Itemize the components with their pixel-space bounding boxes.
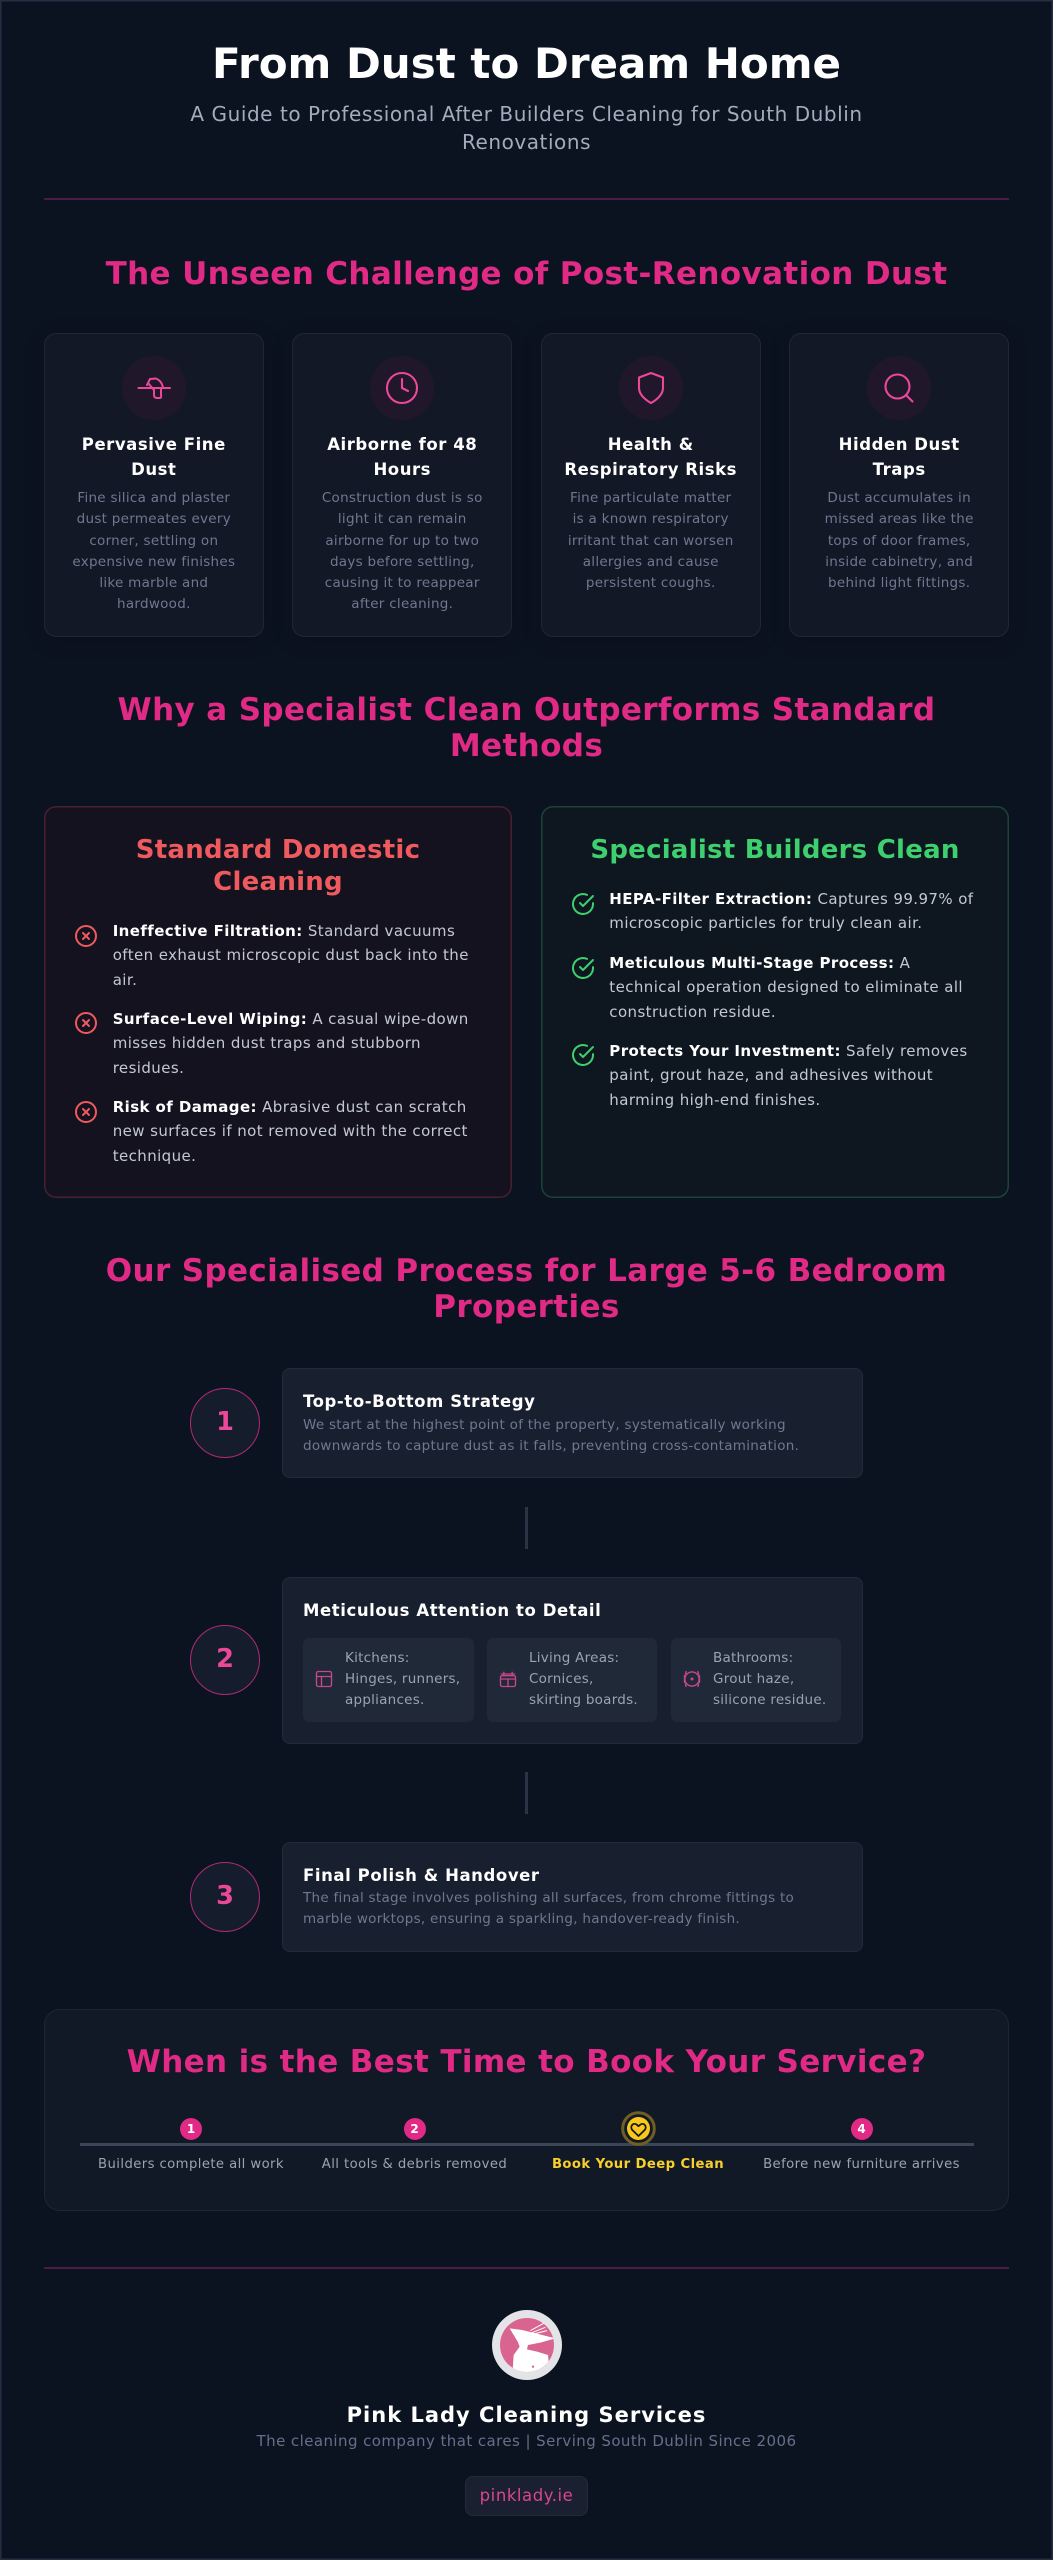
- step label 2: All tools & debris removed: [322, 2157, 507, 2172]
- icon: cross: [75, 1012, 97, 1034]
- panel: specialist builders clean: [541, 806, 1009, 1198]
- step heading: Meticulous Attention to Detail: [303, 1601, 601, 1620]
- step 1: [190, 1368, 863, 1478]
- detail text: Bathrooms:: [713, 1650, 793, 1666]
- heading: unseen challenge: The Unseen Challenge of Post-Renovation Dust: [106, 256, 947, 292]
- step number: 3: [216, 1881, 234, 1911]
- panel: hidden traps: [789, 333, 1009, 637]
- icon: magnifier: [867, 356, 931, 420]
- card heading: [564, 435, 737, 479]
- detail: living areas: [487, 1638, 657, 1722]
- card heading: [839, 435, 960, 479]
- timeline heading: When is the Best Time to Book Your Service?: [127, 2044, 926, 2080]
- step text: marble worktops, ensuring a sparkling, handover-ready finish.: [303, 1910, 740, 1926]
- footer: company name: Pink Lady Cleaning Services: [347, 2403, 706, 2427]
- card text: Construction dust is so: [322, 490, 483, 506]
- step 3: [190, 1842, 863, 1952]
- icon: check: [572, 1044, 594, 1066]
- step marker 1: [180, 2118, 202, 2140]
- card text: [72, 490, 235, 612]
- logo: pink lady: [492, 2310, 562, 2380]
- list item: microscopic particles for truly clean air.: [609, 914, 922, 932]
- card text: [568, 490, 734, 591]
- detail text: Cornices,: [529, 1670, 594, 1686]
- panel heading: Cleaning: [213, 867, 343, 897]
- icon: living areas: [500, 1672, 516, 1688]
- step marker: book (heart): [621, 2111, 656, 2146]
- list item: Meticulous Multi-Stage Process: A: [609, 954, 910, 972]
- list item: [113, 1010, 469, 1077]
- panel: health risks: [541, 333, 761, 637]
- detail text: silicone residue.: [713, 1692, 826, 1708]
- step number: 1: [216, 1407, 234, 1437]
- card text: causing it to reappear: [325, 575, 480, 591]
- list item: [113, 922, 469, 989]
- icon: cross: [75, 1101, 97, 1123]
- detail: bathrooms: [671, 1638, 841, 1722]
- card text: persistent coughs.: [586, 575, 716, 591]
- panel: pervasive fine dust: [44, 333, 264, 637]
- list item: air.: [113, 971, 137, 989]
- step number: [190, 1388, 260, 1458]
- heading: process: Properties: [433, 1289, 620, 1325]
- card text: missed areas like the: [825, 511, 974, 527]
- panel heading: Specialist Builders Clean: [590, 835, 960, 865]
- icon: check: [572, 957, 594, 979]
- list item: Surface-Level Wiping: A casual wipe-down: [113, 1010, 469, 1028]
- card heading: Hidden Dust: [839, 435, 960, 454]
- panel: booking timeline: [44, 2009, 1009, 2211]
- card text: irritant that can worsen: [568, 533, 734, 549]
- arrow: connector: [524, 1772, 528, 1814]
- card heading: Airborne for 48: [327, 435, 477, 454]
- arrow: connector: [524, 1507, 528, 1549]
- step number: 2: [216, 1644, 234, 1674]
- step text: [303, 1416, 799, 1454]
- subtitle: Renovations: [462, 130, 591, 154]
- list item: [113, 1098, 468, 1165]
- card text: [322, 490, 483, 612]
- heading: why specialist: Why a Specialist Clean Outperforms Standard: [118, 692, 935, 728]
- icon: shield: [619, 356, 683, 420]
- card text: is a known respiratory: [573, 511, 729, 527]
- list item: Risk of Damage: Abrasive dust can scratch: [113, 1098, 467, 1116]
- card text: hardwood.: [117, 596, 191, 612]
- step heading: Top-to-Bottom Strategy: [303, 1392, 536, 1411]
- title: From Dust to Dream Home: [212, 39, 841, 88]
- card text: airborne for up to two: [325, 533, 479, 549]
- detail: kitchens: [303, 1638, 474, 1722]
- list item: misses hidden dust traps and stubborn: [113, 1034, 421, 1052]
- step label 4: Before new furniture arrives: [763, 2157, 960, 2172]
- detail text: [345, 1650, 460, 1708]
- icon: bathrooms: [684, 1670, 700, 1688]
- icon: clock: [370, 356, 434, 420]
- step text: [303, 1890, 794, 1926]
- step number: [190, 1625, 260, 1695]
- list item: new surfaces if not removed with the correct: [113, 1122, 468, 1140]
- list item: HEPA-Filter Extraction: Captures 99.97% of: [609, 890, 973, 908]
- card text: Fine silica and plaster: [77, 490, 230, 506]
- list item: [609, 890, 974, 932]
- step marker 4: 4: [857, 2122, 866, 2136]
- card heading: Hours: [373, 460, 431, 479]
- card text: inside cabinetry, and: [825, 554, 973, 570]
- panel heading: [136, 835, 420, 897]
- step text: We start at the highest point of the property, systematically working: [303, 1416, 786, 1432]
- detail text: Living Areas:: [529, 1650, 619, 1666]
- step number: [190, 1862, 260, 1932]
- icon: kitchen: [316, 1670, 332, 1688]
- heading: process: [106, 1253, 947, 1325]
- step label 1: Builders complete all work: [98, 2157, 284, 2172]
- heading: process: Our Specialised Process for Large 5-6 Bedroom: [106, 1253, 947, 1289]
- card text: light it can remain: [338, 511, 467, 527]
- list item: residues.: [113, 1059, 184, 1077]
- detail text: [713, 1650, 826, 1708]
- list item: technique.: [113, 1147, 196, 1165]
- detail text: Kitchens:: [345, 1650, 410, 1666]
- card text: days before settling,: [330, 554, 475, 570]
- card text: like marble and: [99, 575, 208, 591]
- icon: cross: [75, 925, 97, 947]
- icon: check: [572, 893, 594, 915]
- step 2: [190, 1577, 863, 1744]
- heading: why specialist: Methods: [450, 728, 603, 764]
- subtitle: A Guide to Professional After Builders Cleaning for South Dublin: [190, 102, 863, 126]
- step label: book: Book Your Deep Clean: [552, 2157, 724, 2172]
- card text: after cleaning.: [351, 596, 453, 612]
- card heading: Health &: [608, 435, 694, 454]
- footer: website pill: pinklady.ie: [480, 2486, 573, 2505]
- list item: often exhaust microscopic dust back into the: [113, 946, 469, 964]
- footer: website pill: [465, 2476, 588, 2516]
- card text: [825, 490, 974, 591]
- detail text: skirting boards.: [529, 1692, 638, 1708]
- card text: dust permeates every: [77, 511, 231, 527]
- panel: airborne: [292, 333, 512, 637]
- card text: tops of door frames,: [828, 533, 970, 549]
- step marker 2: [404, 2118, 426, 2140]
- card text: Fine particulate matter: [570, 490, 731, 506]
- card text: Dust accumulates in: [827, 490, 971, 506]
- list item: technical operation designed to eliminate all: [609, 978, 963, 996]
- list item: Protects Your Investment: Safely removes: [609, 1042, 968, 1060]
- list item: harming high-end finishes.: [609, 1091, 821, 1109]
- step card: [282, 1842, 863, 1952]
- card heading: [82, 435, 226, 479]
- step marker 1: 1: [187, 2122, 195, 2136]
- detail text: [529, 1650, 638, 1708]
- icon: dust: [122, 356, 186, 420]
- panel: standard domestic cleaning: [44, 806, 512, 1198]
- list item: construction residue.: [609, 1003, 776, 1021]
- card heading: Pervasive Fine: [82, 435, 226, 454]
- timeline track: [80, 2142, 974, 2146]
- card heading: Traps: [873, 460, 926, 479]
- step heading: Final Polish & Handover: [303, 1866, 540, 1885]
- card heading: Respiratory Risks: [564, 460, 737, 479]
- footer: tagline: The cleaning company that cares | Serving South Dublin Since 2006: [257, 2432, 796, 2450]
- card text: behind light fittings.: [828, 575, 970, 591]
- card text: corner, settling on: [89, 533, 218, 549]
- subtitle: [190, 102, 863, 154]
- heading: why specialist: [118, 692, 935, 764]
- list item: paint, grout haze, and adhesives without: [609, 1066, 933, 1084]
- card text: allergies and cause: [583, 554, 719, 570]
- panel heading: Standard Domestic: [136, 835, 420, 865]
- card text: expensive new finishes: [72, 554, 235, 570]
- step marker 2: 2: [410, 2122, 419, 2136]
- detail text: appliances.: [345, 1692, 425, 1708]
- step card: [282, 1368, 863, 1478]
- step text: downwards to capture dust as it falls, preventing cross-contamination.: [303, 1438, 799, 1454]
- list item: [609, 1042, 968, 1109]
- step card: [282, 1577, 863, 1744]
- card heading: Dust: [131, 460, 176, 479]
- step text: The final stage involves polishing all surfaces, from chrome fittings to: [303, 1890, 794, 1906]
- detail text: Grout haze,: [713, 1670, 794, 1686]
- detail text: Hinges, runners,: [345, 1670, 460, 1686]
- step marker 4: [851, 2118, 873, 2140]
- list item: [609, 954, 963, 1021]
- list item: Ineffective Filtration: Standard vacuums: [113, 922, 455, 940]
- card heading: [327, 435, 477, 479]
